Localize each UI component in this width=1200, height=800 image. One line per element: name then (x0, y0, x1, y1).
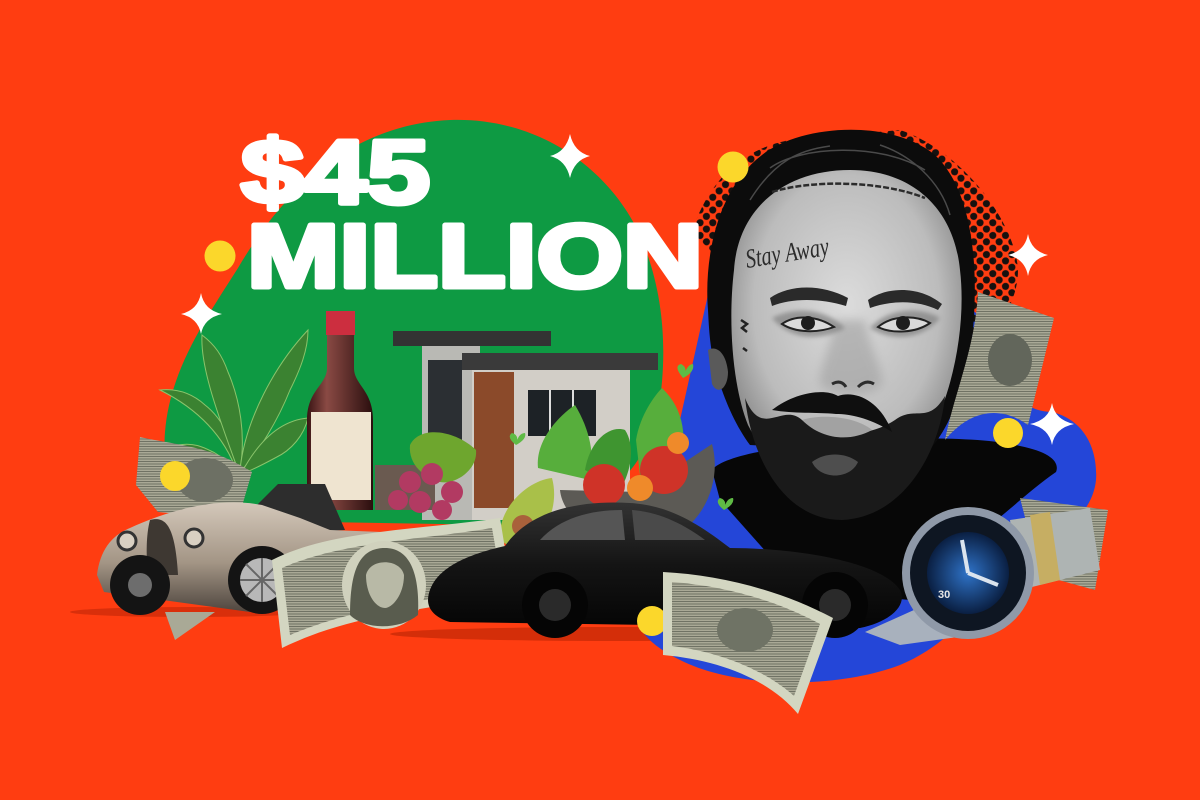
banknote: bottom (637, 572, 833, 714)
ground shadows (70, 607, 850, 641)
eye sockets (772, 311, 940, 337)
house (375, 331, 658, 520)
eyebrows (770, 288, 848, 306)
black sports car (428, 502, 902, 638)
forehead tattoo (772, 184, 925, 198)
beard (745, 396, 945, 520)
lower note corner (165, 612, 215, 640)
yellow dots (204, 152, 748, 272)
ear (708, 348, 728, 390)
sparkles (181, 134, 1074, 445)
grapes and leaf (388, 432, 476, 520)
banknote: left (136, 437, 252, 520)
title line 2: MILLION (247, 207, 703, 307)
cannabis leaf (160, 330, 308, 505)
vintage silver convertible (97, 484, 470, 640)
chin patch (812, 454, 858, 476)
hair strands (750, 145, 950, 215)
portrait (707, 130, 1057, 600)
moustache (772, 392, 892, 432)
green blob (165, 120, 663, 525)
banknote: right of portrait (945, 292, 1054, 448)
hair (707, 130, 975, 455)
salad bowl (538, 388, 715, 540)
title (241, 123, 703, 307)
banknote: centre with portrait (272, 518, 512, 648)
wine bottle (307, 311, 373, 510)
cabin (252, 484, 345, 535)
halftone backdrop (692, 130, 1018, 345)
bowl (560, 444, 715, 540)
jacket (712, 438, 1057, 600)
blue blob (636, 232, 1096, 682)
sprouts (510, 364, 733, 510)
banknote: behind watch (1020, 498, 1108, 590)
face tattoo: Stay Away (743, 231, 831, 274)
body (97, 502, 470, 612)
bezel numeral: 30 (938, 589, 950, 601)
eyes (782, 318, 834, 331)
grille (147, 519, 178, 575)
cheek tattoo (741, 320, 747, 351)
title line 1: $45 (241, 123, 430, 223)
nostrils (832, 382, 874, 387)
nose shading (820, 320, 882, 395)
lips (802, 417, 872, 437)
face (731, 170, 962, 492)
avocado (500, 478, 554, 546)
wristwatch (865, 507, 1100, 645)
